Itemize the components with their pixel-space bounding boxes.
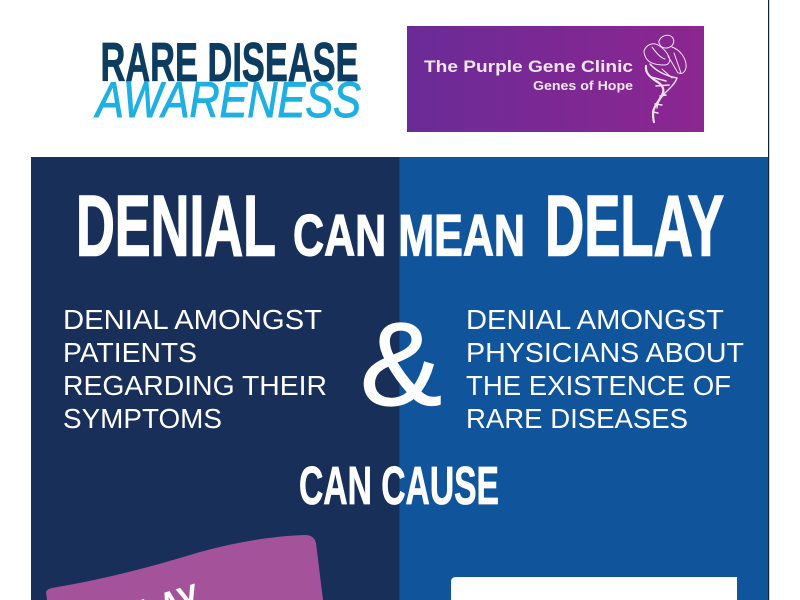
title bbox=[76, 178, 724, 274]
text block: physician denial: RARE DISEASES bbox=[466, 403, 688, 434]
text block: patient denial: PATIENTS bbox=[63, 337, 197, 368]
icon: parent, child and DNA helix bbox=[644, 35, 686, 122]
logo script: Awareness: AWARENESS bbox=[93, 72, 361, 128]
purple tag shape bbox=[46, 535, 323, 600]
text block: patient denial bbox=[63, 304, 327, 434]
text block: physician denial: THE EXISTENCE OF bbox=[466, 370, 731, 401]
text block: patient denial: SYMPTOMS bbox=[63, 403, 222, 434]
text block: physician denial: PHYSICIANS ABOUT bbox=[466, 337, 744, 368]
subheading: can cause: CAN CAUSE bbox=[299, 456, 499, 516]
ampersand: & bbox=[360, 299, 442, 431]
clinic tagline: Genes of Hope bbox=[533, 79, 633, 93]
panel: left half background bbox=[31, 157, 400, 600]
white card bbox=[451, 577, 737, 600]
text block: patient denial: DENIAL AMONGST bbox=[63, 304, 322, 335]
right edge line bbox=[768, 0, 769, 600]
text block: physician denial bbox=[466, 304, 744, 434]
title word: Denial: DENIAL bbox=[76, 178, 276, 274]
clinic name: The Purple Gene Clinic bbox=[424, 57, 633, 76]
logo: The Purple Gene Clinic bbox=[407, 26, 704, 132]
text block: patient denial: REGARDING THEIR bbox=[63, 370, 327, 401]
panel: right half background bbox=[400, 157, 768, 600]
title words: can mean: CAN MEAN bbox=[293, 204, 525, 268]
logo background bbox=[407, 26, 704, 132]
logo: Rare Disease Awareness bbox=[93, 31, 361, 128]
callout: delay tag bbox=[46, 535, 323, 600]
logo heading: Rare Disease: RARE DISEASE bbox=[100, 31, 358, 93]
text block: physician denial: DENIAL AMONGST bbox=[466, 304, 724, 335]
